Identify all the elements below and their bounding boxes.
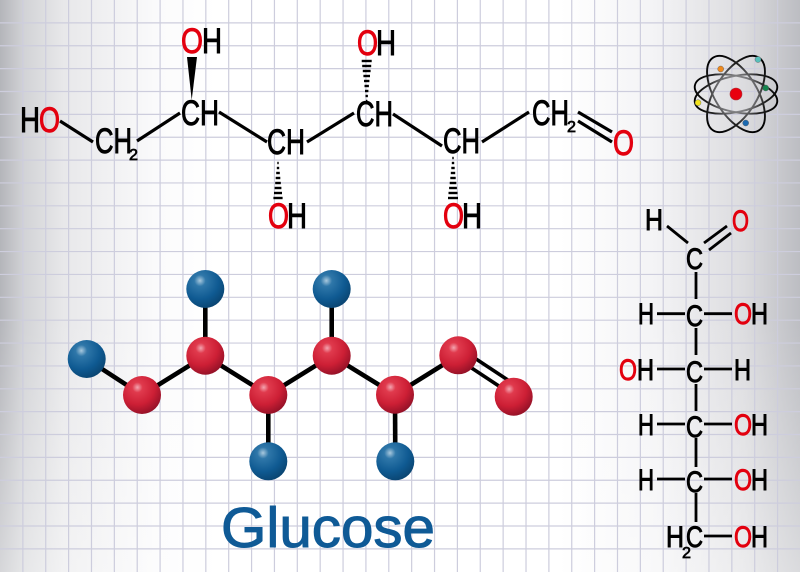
label: OH bottom 1: O: [268, 197, 289, 236]
row: H-C-OH: O: [734, 298, 752, 331]
label: OH bottom 1: [268, 197, 307, 236]
row: OH-C-H: O: [619, 354, 637, 387]
label: OH bottom 2: O: [443, 197, 464, 236]
label: CH2 right: CH: [532, 94, 569, 133]
label: OH bottom 1: H: [287, 197, 307, 236]
label: OH top 2: O: [357, 24, 378, 63]
label: OH top 2: [357, 24, 396, 63]
row: H2C-OH: C: [686, 521, 703, 554]
label: CH2: 2: [129, 147, 138, 164]
row: OH-C-H: H: [637, 354, 654, 387]
hashed wedge down: [273, 163, 283, 198]
label: OH bottom 2: H: [462, 197, 482, 236]
row: H2C-OH: 2: [682, 545, 691, 562]
ball-and-stick model: [68, 270, 533, 480]
aldehyde group: C: [686, 243, 703, 276]
row: H-C-OH: C: [686, 411, 703, 444]
label: OH top 2: H: [376, 24, 396, 63]
row: H2C-OH: H: [751, 521, 768, 554]
bond: CH to CH: [393, 114, 442, 146]
label: OH top 1: H: [202, 22, 222, 61]
label: CH carbon 3: CH: [356, 95, 393, 134]
row: H-C-OH: O: [734, 409, 752, 442]
label: OH bottom 2: [443, 197, 482, 236]
aldehyde group: [645, 204, 749, 276]
label: O right: O: [613, 124, 634, 163]
row: H-C-OH: O: [734, 464, 752, 497]
bond: CH to CH: [307, 113, 354, 142]
row: H-C-OH: H: [751, 298, 768, 331]
skeletal formula: open-chain glucose: [20, 22, 634, 236]
label: HO left end: O: [39, 101, 60, 140]
row: H-C-OH: H: [751, 409, 768, 442]
row: H-C-OH: H: [751, 464, 768, 497]
bond: HO to CH2: [60, 121, 93, 142]
icon: atom: [691, 46, 781, 142]
label: OH top 1: O: [181, 22, 203, 61]
row: H-C-OH: H: [638, 464, 654, 497]
label: HO left end: H: [20, 101, 40, 140]
carbon chain bonds: [695, 272, 697, 522]
row: OH-C-H: H: [734, 354, 751, 387]
row: H-C-OH: [638, 409, 768, 444]
Fischer projection: [619, 204, 768, 562]
row: H2C-OH: H: [666, 521, 684, 554]
hashed wedge up: [362, 61, 372, 101]
row: H-C-OH: C: [686, 300, 703, 333]
row: H2C-OH: O: [734, 521, 752, 554]
aldehyde group: H: [645, 204, 663, 237]
aldehyde group: O: [732, 205, 749, 238]
row: H-C-OH: H: [638, 298, 654, 331]
row: OH-C-H: [619, 354, 751, 389]
bond: CH to CH2: [482, 112, 529, 142]
label: CH2 right: 2: [567, 119, 576, 136]
row: OH-C-H: C: [686, 356, 703, 389]
label: OH top 1: [181, 22, 222, 61]
sticks: [87, 289, 517, 461]
row: H-C-OH: H: [638, 409, 654, 442]
hashed wedge down: [448, 158, 458, 198]
row: H-C-OH: [638, 464, 768, 499]
carbon and oxygen atoms: red: [123, 336, 533, 416]
bond: CH to CH: [219, 112, 267, 142]
wedge bond up: [187, 57, 197, 100]
row: H2C-OH: [666, 521, 768, 562]
label: CH carbon 1: CH: [181, 94, 219, 133]
double bond to O: [578, 112, 612, 142]
label: HO left end: [20, 101, 60, 140]
title: Glucose: [221, 496, 435, 560]
row: H-C-OH: C: [686, 466, 703, 499]
hydroxyl atoms: blue: [68, 270, 414, 480]
label: CH carbon 2: CH: [267, 123, 305, 162]
label: CH carbon 4: CH: [443, 122, 480, 161]
row: H-C-OH: [638, 298, 768, 333]
bond: CH2 to CH: [137, 113, 180, 141]
label: CH2: CH: [95, 122, 132, 161]
